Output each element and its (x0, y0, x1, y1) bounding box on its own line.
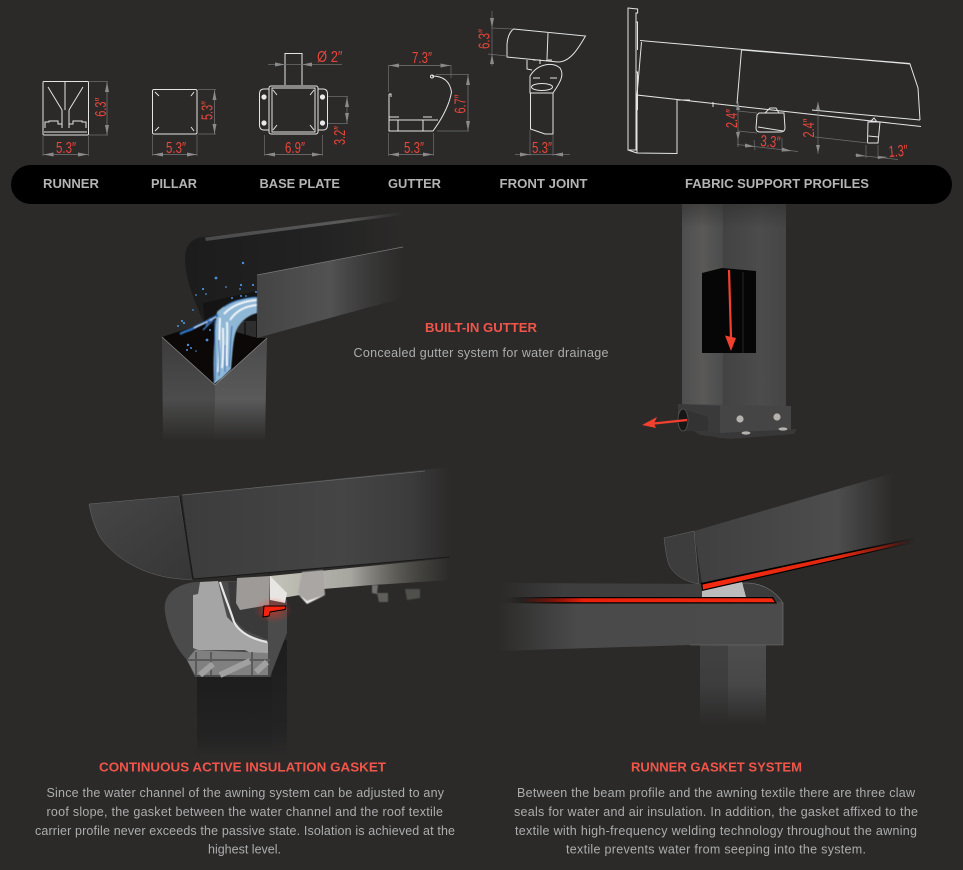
pillar left face (682, 200, 723, 406)
dimension: 6.3: 6.3″ (476, 29, 494, 49)
dimension: 6.3: 6.3″ (93, 97, 110, 117)
dimension: 5.3: 5.3″ (56, 140, 76, 157)
post (700, 645, 766, 725)
panel: runner gasket text (514, 760, 918, 856)
pillar right face (214, 338, 267, 441)
paragraph: runner gasket: textile prevents water from seeping into the system. (566, 842, 866, 856)
panel: continuous gasket illustration (89, 467, 450, 757)
pillar opening (162, 323, 267, 385)
dimension: 5.3: 5.3″ (532, 140, 552, 157)
panel: continuous gasket text (35, 760, 455, 856)
section cap outer (165, 580, 287, 677)
dimension: 6.9: 6.9″ (285, 140, 305, 157)
beam lower face (497, 603, 783, 651)
pillar left face (162, 337, 215, 441)
label: base plate: BASE PLATE (260, 176, 340, 191)
paragraph: continuous gasket: roof slope, the gasket between the water channel and the roof textile (46, 805, 443, 819)
paragraph: continuous gasket (35, 786, 455, 856)
label: gutter: GUTTER (388, 176, 442, 191)
arrow: water out (642, 417, 687, 428)
light block (270, 576, 287, 603)
pillar right face (723, 200, 786, 406)
paragraph: runner gasket: textile with high-frequency welding technology throughout the awning (515, 824, 917, 838)
dimension: 2.4 right: 2.4″ (801, 118, 818, 138)
upper beam (694, 473, 893, 583)
drain pipe (683, 409, 708, 431)
fabric support blocks (298, 570, 420, 604)
section cap inner (193, 581, 268, 654)
beam top strip (500, 583, 710, 597)
diagram: fabric support profiles (628, 8, 921, 161)
paragraph: continuous gasket: highest level. (208, 842, 281, 856)
main beam panel (182, 467, 450, 579)
dimension: 7.3: 7.3″ (412, 50, 432, 67)
post (197, 640, 287, 757)
red gasket (263, 606, 286, 617)
gutter channel interior (203, 291, 257, 338)
bolts (736, 413, 788, 435)
dimension: 3.3: 3.3″ (760, 133, 781, 152)
paragraph: continuous gasket: carrier profile never exceeds the passive state. Isolation is achieved at the (35, 824, 455, 838)
gutter inner shell (185, 213, 403, 338)
paragraph: runner gasket: Between the beam profile and the awning textile there are three claw (517, 786, 916, 800)
drain window (702, 268, 756, 353)
water droplets (177, 262, 257, 352)
heading: continuous gasket: CONTINUOUS ACTIVE INSULATION GASKET (99, 760, 386, 774)
label bar (11, 165, 952, 204)
dimension: 6.7: 6.7″ (453, 94, 470, 114)
arrow: water down (725, 270, 736, 351)
paragraph: runner gasket: seals for water and air insulation. In addition, the gasket affixed to the (514, 805, 918, 819)
upper beam end cap (664, 531, 699, 584)
panel: built-in gutter illustration (162, 212, 403, 441)
gutter top lip (205, 212, 403, 241)
dark inner wedge (228, 580, 268, 640)
heading: built-in gutter: BUILT-IN GUTTER (425, 320, 538, 335)
dimension: 3.2: 3.2″ (332, 126, 349, 145)
curved end cap (740, 583, 783, 603)
heading: runner gasket: RUNNER GASKET SYSTEM (631, 760, 802, 774)
diagram: base plate (260, 49, 349, 157)
label: front joint: FRONT JOINT (500, 176, 588, 191)
dimension: diameter 2: Ø 2″ (317, 49, 343, 66)
diagram: pillar profile (152, 90, 217, 157)
base plate body (678, 404, 791, 438)
diagram: gutter (388, 50, 470, 157)
section floor (187, 650, 268, 675)
panel: runner gasket illustration (497, 473, 917, 725)
water stream (180, 297, 257, 384)
angled red gasket (701, 537, 917, 591)
dimension: 5.3: 5.3″ (404, 140, 424, 157)
gutter front panel (257, 247, 403, 338)
label: runner: RUNNER (43, 176, 100, 191)
lit underside beam (270, 558, 450, 600)
dimension: 2.4 left: 2.4″ (724, 109, 741, 128)
horizontal red gasket (510, 597, 777, 604)
white block (702, 582, 746, 597)
paragraph: continuous gasket: Since the water channel of the awning system can be adjusted to any (46, 786, 445, 800)
dimension: 5.3 height: 5.3″ (200, 101, 217, 120)
dimension: 1.3: 1.3″ (888, 143, 908, 161)
gutter cap (89, 496, 193, 579)
dimension: 5.3 width: 5.3″ (166, 140, 186, 157)
label: fabric support profiles: FABRIC SUPPORT PROFILES (685, 176, 869, 191)
white gasket strip (220, 582, 267, 642)
panel: built-in gutter text (354, 320, 609, 360)
description: concealed gutter: Concealed gutter system for water drainage (354, 346, 609, 360)
diagram: front joint (476, 11, 586, 157)
label: pillar: PILLAR (151, 176, 198, 191)
red gasket glow (254, 597, 292, 623)
panel: pillar drainage illustration (642, 200, 797, 439)
diagram: runner profile (43, 82, 110, 157)
paragraph: runner gasket (514, 786, 918, 856)
